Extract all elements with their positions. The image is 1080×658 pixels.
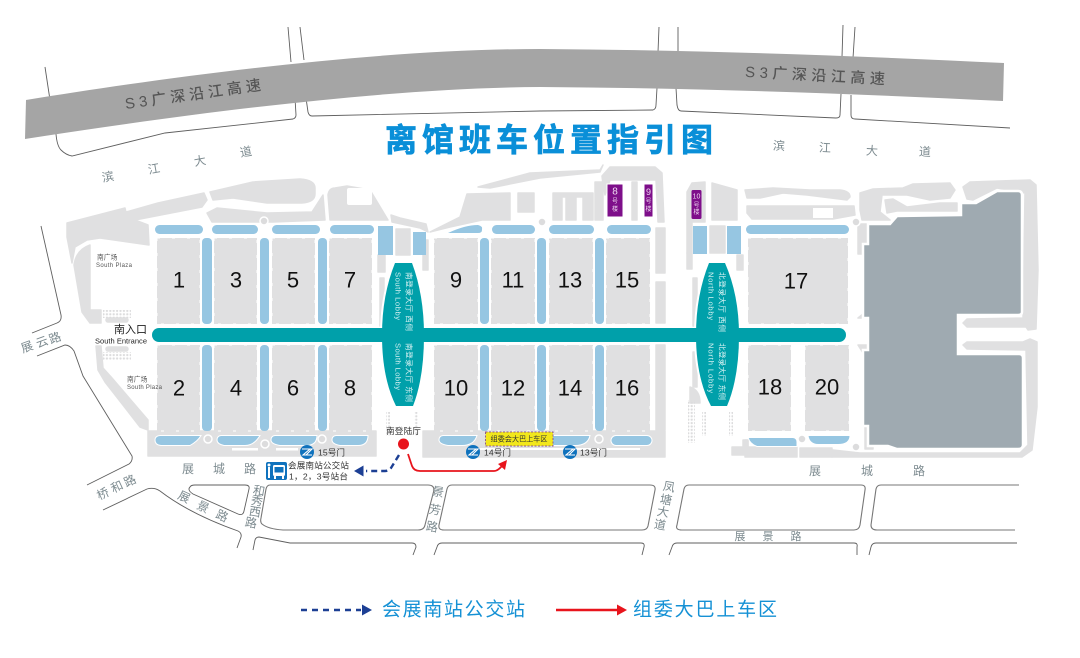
hall numbers: 15 [615, 268, 639, 292]
road names: 道 [653, 517, 667, 533]
road names: 桥 [95, 485, 111, 503]
road names: 塘 [659, 491, 673, 508]
purple building 8: 楼 [612, 205, 618, 213]
south lobby [382, 263, 424, 406]
callout: shuttle boarding zone [486, 432, 553, 446]
bus station label: 会展南站公交站 [288, 460, 349, 470]
highway label right: S3广深沿江高速 [745, 64, 885, 88]
purple building 9: 9 [646, 187, 651, 197]
dotted paving [103, 310, 733, 443]
hall numbers: 17 [784, 268, 808, 294]
road names: 景 [762, 530, 774, 543]
north lobby: 北登录大厅 西侧 [718, 272, 728, 332]
hall numbers: 10 [444, 376, 468, 400]
road names: 芳 [428, 502, 442, 518]
ground road cuts [232, 188, 833, 450]
hall numbers: 20 [815, 374, 839, 400]
gate 14 [466, 445, 511, 459]
hall numbers: 14 [558, 376, 582, 400]
icon: bus stop [266, 462, 287, 480]
bus station label [288, 460, 349, 482]
road names: 路 [244, 514, 258, 531]
hall numbers: 18 [758, 374, 782, 400]
purple building 9 [644, 184, 653, 217]
south plaza label upper: 南广场 [97, 252, 118, 262]
bus station label: 1，2，3号站台 [289, 470, 348, 482]
hall numbers: 6 [287, 376, 299, 400]
road names: 城 [213, 462, 225, 476]
road names: 路 [121, 471, 138, 490]
gate 15: 15号门 [318, 446, 345, 458]
road names [19, 138, 931, 543]
road names: 大 [193, 153, 207, 169]
convention building mass [863, 191, 1023, 449]
road names: 江 [819, 141, 831, 155]
legend: bus station route: 会展南站公交站 [382, 598, 525, 620]
purple building 8: 号 [612, 198, 618, 205]
gate 13 [563, 445, 607, 459]
hall numbers: 7 [344, 268, 356, 292]
south landing hall marker: 南登陆厅 [386, 425, 421, 436]
gate 15 [300, 445, 345, 459]
purple building 8: 8 [612, 186, 618, 198]
hall numbers: 2 [173, 376, 185, 400]
highway label left: S3广深沿江高速 [124, 77, 262, 113]
south plaza label lower: 南广场 [127, 374, 148, 384]
north lobby: North Lobby [706, 343, 716, 393]
road names: 展 [734, 530, 746, 543]
road names: 路 [790, 530, 802, 543]
legend: bus station route [301, 598, 525, 620]
south plaza label lower: South Plaza [127, 385, 163, 391]
road names: 展 [176, 488, 192, 506]
south lobby: South Lobby [394, 343, 402, 390]
hall numbers: 3 [230, 268, 242, 292]
road names: 滨 [101, 168, 115, 185]
north lobby: North Lobby [706, 272, 716, 320]
road names: 景 [195, 498, 211, 516]
road names: 江 [147, 161, 161, 177]
south plaza label upper: South Plaza [96, 263, 133, 269]
legend: shuttle route: 组委大巴上车区 [633, 598, 777, 620]
gate 13: 13号门 [580, 446, 607, 458]
highway S3 [25, 49, 1004, 139]
lower blue service pads [155, 436, 850, 446]
road names: 和 [109, 478, 125, 496]
arrow: red to shuttle area [408, 454, 507, 471]
purple building 8 [607, 184, 623, 217]
roundabouts [204, 217, 860, 451]
road names: 路 [913, 463, 925, 478]
road names: 道 [239, 144, 253, 160]
purple building 10: 10 [693, 194, 700, 200]
arrow: dashed blue to bus station [354, 455, 399, 476]
north lobby: 北登录大厅 东侧 [718, 343, 728, 400]
road names: 城 [861, 464, 873, 478]
purple building 9: 号 [645, 198, 652, 205]
title: 离馆班车位置指引图 [385, 122, 713, 158]
south entrance label: 南入口 [114, 323, 147, 336]
hall numbers: 12 [501, 376, 525, 400]
hall numbers: 16 [615, 376, 639, 400]
hall numbers [173, 268, 839, 400]
purple building 9: 楼 [645, 205, 652, 213]
south entrance label [95, 323, 147, 346]
purple building 10 [692, 190, 702, 219]
hall numbers: 9 [450, 268, 462, 292]
road names: 滨 [773, 138, 785, 153]
road names: 凤 [662, 479, 676, 495]
south lobby: 南登录大厅 东侧 [404, 343, 414, 402]
road names: 和 [252, 483, 266, 499]
hall numbers: 11 [502, 268, 524, 292]
road names: 路 [244, 461, 256, 476]
hall numbers: 13 [558, 268, 582, 292]
hall numbers: 8 [344, 376, 356, 400]
south entrance label: South Entrance [95, 336, 147, 346]
road names: 景 [431, 484, 445, 500]
road names: 路 [425, 518, 439, 535]
hall numbers: 4 [230, 376, 242, 400]
road names: 展 [182, 462, 194, 476]
north lobby [696, 263, 739, 406]
road outlines [32, 25, 1019, 555]
road names: 路 [214, 506, 231, 525]
callout: shuttle boarding zone: 组委会大巴上车区 [490, 434, 548, 444]
exhibition halls [157, 238, 849, 431]
gate 14: 14号门 [484, 446, 511, 458]
road names: 秀 [250, 493, 264, 509]
blue service strips [155, 225, 849, 431]
road names: 西 [248, 504, 262, 520]
hall numbers: 1 [173, 268, 185, 292]
road names: 展 [19, 338, 35, 356]
purple building 10: 楼 [693, 208, 700, 216]
road names: 路 [47, 328, 63, 347]
legend: shuttle route [556, 598, 777, 620]
road names: 大 [866, 144, 878, 158]
hall numbers: 5 [287, 268, 299, 292]
road names: 展 [809, 464, 821, 478]
south lobby: 南登录大厅 西侧 [404, 272, 414, 331]
main concourse [152, 328, 846, 342]
road names: 大 [656, 504, 670, 520]
road names: 道 [919, 145, 931, 159]
road names: 云 [34, 333, 50, 351]
purple building 10: 号 [693, 202, 700, 209]
south plaza label lower [127, 374, 163, 391]
venue grounds [67, 165, 1038, 457]
south plaza label upper [96, 252, 133, 269]
south landing hall marker [386, 425, 421, 450]
south lobby: South Lobby [394, 272, 402, 320]
